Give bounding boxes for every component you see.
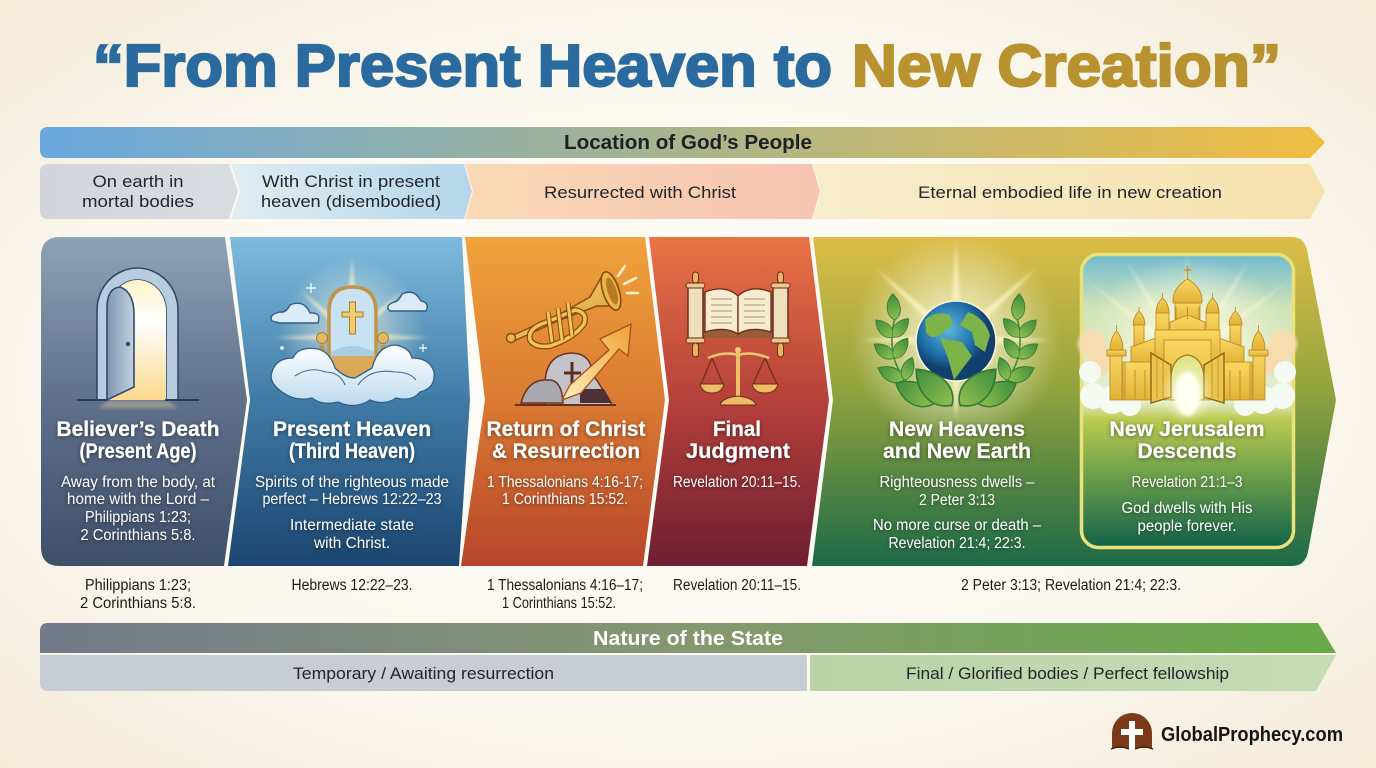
third towers — [1156, 313, 1219, 345]
body text: Revelation 21:1–3 — [1132, 474, 1242, 491]
second towers — [1134, 325, 1241, 350]
scripture references row — [80, 577, 1181, 612]
scripture references row: Philippians 1:23; — [85, 577, 191, 594]
heading: Believer’s Death — [56, 418, 220, 441]
heading — [486, 418, 646, 463]
panel: final judgment — [647, 237, 829, 566]
scripture references row: Revelation 20:11–15. — [673, 577, 801, 594]
banner: location of God's people — [40, 127, 1325, 158]
heading: New Jerusalem — [1110, 418, 1264, 441]
scripture references row: Hebrews 12:22–23. — [292, 577, 412, 594]
body text — [487, 474, 643, 508]
icon: scales — [700, 347, 778, 405]
state: final — [810, 655, 1336, 691]
heading — [883, 418, 1031, 463]
state: temporary: Temporary / Awaiting resurrection — [293, 664, 554, 683]
body text — [255, 474, 449, 552]
icon: tomb — [515, 353, 616, 405]
location: resurrected: Resurrected with Christ — [544, 183, 736, 202]
heading: Judgment — [686, 440, 790, 463]
heading: New Heavens — [889, 418, 1025, 441]
heading — [1110, 418, 1264, 463]
wordmark: GlobalProphecy.com — [1161, 724, 1343, 746]
location: on earth: On earth in — [92, 172, 184, 191]
heading: Return of Christ — [486, 418, 646, 441]
location row — [40, 164, 1325, 219]
title: New Creation” — [852, 33, 1281, 99]
scripture references row: 2 Peter 3:13; Revelation 21:4; 22:3. — [961, 577, 1181, 594]
icon: open book and scroll — [686, 272, 790, 357]
body text — [1122, 474, 1253, 535]
state: temporary — [40, 655, 807, 691]
scripture references row: 1 Corinthians 15:52. — [502, 595, 616, 612]
location: eternal life — [813, 164, 1325, 219]
location: on earth — [40, 164, 238, 219]
heading — [273, 418, 431, 463]
heading: Final — [713, 418, 761, 441]
icon: globe with laurel — [851, 235, 1061, 445]
location: present heaven: heaven (disembodied) — [261, 192, 441, 211]
body text: Revelation 21:4; 22:3. — [888, 535, 1026, 552]
panel: believer's death — [41, 237, 247, 566]
drum and dome — [1175, 303, 1200, 320]
icon: open door — [77, 268, 199, 408]
location: eternal life: Eternal embodied life in new creation — [918, 183, 1222, 202]
body text: No more curse or death – — [873, 517, 1041, 534]
body text: Revelation 20:11–15. — [673, 474, 801, 491]
icon: trumpet — [506, 266, 638, 346]
scripture references row: 1 Thessalonians 4:16–17; — [487, 577, 643, 594]
icon: rising arrow — [562, 324, 631, 400]
body text: home with the Lord – — [67, 491, 209, 508]
body text: Spirits of the righteous made — [255, 474, 449, 491]
body text: 1 Thessalonians 4:16-17; — [487, 474, 643, 491]
body text — [61, 474, 216, 544]
panel: return of Christ — [461, 237, 665, 566]
logo: GlobalProphecy.com — [1111, 713, 1343, 749]
scripture references row: 2 Corinthians 5:8. — [80, 595, 196, 612]
panel: new heavens and new earth — [812, 235, 1336, 566]
heading: Present Heaven — [273, 418, 431, 441]
body text: Away from the body, at — [61, 474, 216, 491]
body text: 1 Corinthians 15:52. — [502, 491, 628, 508]
heading: Descends — [1138, 440, 1236, 463]
state: final: Final / Glorified bodies / Perfect fellowship — [906, 664, 1229, 683]
icon: throne on cloud — [271, 258, 434, 406]
body text: Intermediate state — [290, 517, 414, 534]
heading: & Resurrection — [492, 440, 640, 463]
banner: nature of the state — [40, 623, 1336, 653]
mid walls — [1131, 338, 1244, 364]
heading: (Present Age) — [80, 440, 196, 463]
banner: nature of the state: Nature of the State — [593, 628, 783, 650]
title: “From Present Heaven to — [93, 33, 832, 99]
banner: location of God's people: Location of God’s People — [564, 132, 812, 154]
body text: people forever. — [1138, 518, 1236, 535]
body text: Philippians 1:23; — [85, 509, 191, 526]
location: on earth: mortal bodies — [82, 192, 194, 211]
outer towers — [1110, 350, 1265, 400]
body text: 2 Peter 3:13 — [919, 492, 995, 509]
icon: golden city — [1078, 256, 1297, 424]
location: present heaven — [231, 164, 472, 219]
heading: (Third Heaven) — [289, 440, 415, 463]
body text: 2 Corinthians 5:8. — [80, 527, 196, 544]
location: present heaven: With Christ in present — [262, 172, 440, 191]
body text — [873, 474, 1041, 552]
panel: present heaven — [228, 237, 470, 566]
body text: Righteousness dwells – — [880, 474, 1035, 491]
heading — [56, 418, 220, 463]
body text: God dwells with His — [1122, 500, 1253, 517]
card: new Jerusalem — [1078, 254, 1297, 548]
lower walls — [1123, 362, 1152, 400]
heading — [686, 418, 790, 463]
body text: with Christ. — [313, 535, 390, 552]
location: resurrected — [465, 164, 820, 219]
body text: perfect – Hebrews 12:22–23 — [262, 491, 442, 508]
heading: and New Earth — [883, 440, 1031, 463]
icon: cross and book — [1111, 713, 1153, 749]
title — [93, 33, 1281, 99]
